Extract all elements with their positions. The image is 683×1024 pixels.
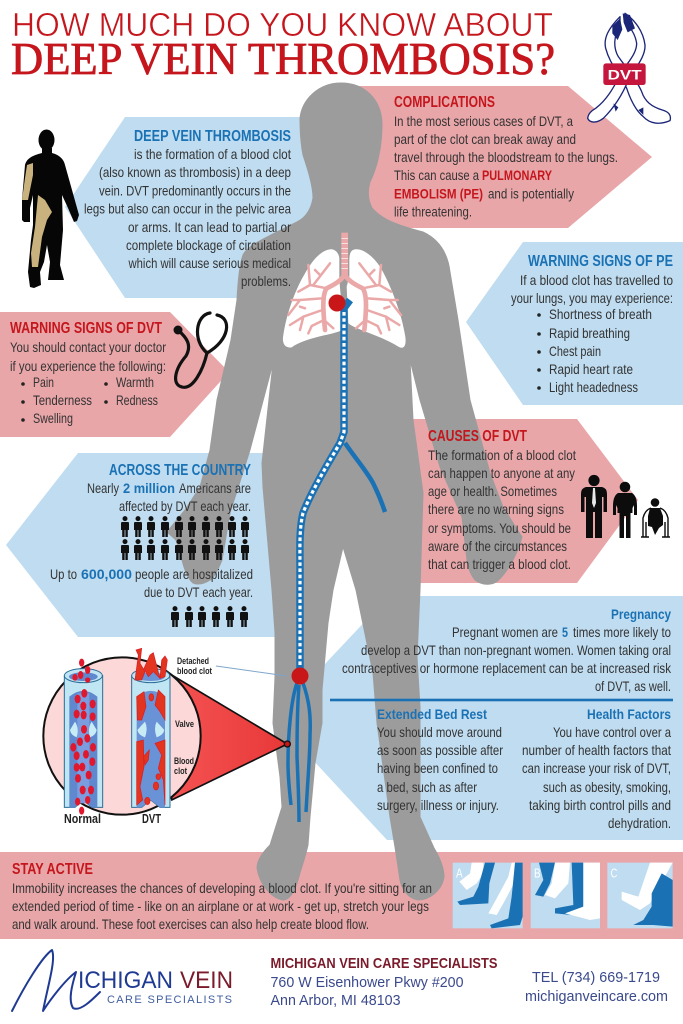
text: deep vein thrombosis: problems. [241,273,291,289]
text: complications: PULMONARY [482,167,553,183]
text: complications: travel through the bloodstream to the lungs. [394,149,618,165]
logo: Michigan Vein Care Specialists: ICHIGAN [78,967,173,994]
text: warning signs of DVT: Tenderness [33,392,92,408]
diagram: normal vs DVT vein [43,648,290,826]
text: warning signs of DVT: Swelling [33,410,73,426]
extended bed rest: Extended Bed Rest [377,706,487,722]
text: causes of DVT: that can trigger a blood clot. [428,556,571,572]
magnifier circle [43,657,201,815]
text: deep vein thrombosis: vein. DVT predominantly occurs in the [99,182,291,198]
label: blood clot: Blood [174,756,194,767]
health factors: Health Factors [587,706,671,722]
pregnancy: 5 [562,624,568,640]
text: deep vein thrombosis [84,128,291,289]
extended bed rest: You should move around [377,724,502,740]
text: warning signs of DVT: You should contact your doctor [10,339,166,355]
text: across the country: 2 million [123,480,175,496]
label: detached blood clot: blood clot [177,666,213,677]
icon: awareness ribbon with DVT badge: DVT [608,66,642,82]
text: across the country [50,462,253,600]
veins [288,300,385,822]
exercise B: B [534,865,541,880]
text: complications: life threatening. [394,204,472,220]
text: warning signs of PE: Rapid heart rate [549,361,633,377]
text: complications: In the most serious cases of DVT, a [394,113,573,129]
text: warning signs of DVT: Redness [116,392,158,408]
panel: risk factors background [274,596,683,840]
exercise C [607,863,673,928]
panel: deep vein thrombosis background [65,117,330,298]
text: across the country: Americans are [179,480,251,496]
footer: contact: TEL (734) 669-1719 [532,969,660,986]
text: deep vein thrombosis: legs but also can occur in the pelvic area [84,200,291,216]
footer: address: MICHIGAN VEIN CARE SPECIALISTS [270,955,498,972]
title [11,6,555,84]
text: risk factors [330,606,673,831]
panel: across the country background [6,453,300,637]
foot exercises illustration [453,863,673,928]
text: stay active [12,861,432,932]
text: across the country: people are hospitalized [135,566,253,582]
pregnancy: Pregnant women are [452,624,558,640]
DVT vein tube [132,648,170,807]
text: causes of DVT: there are no warning signs [428,501,564,517]
text: warning signs of DVT: WARNING SIGNS OF DVT [10,320,162,337]
icons: 600,000 people [171,606,248,627]
text: causes of DVT: The formation of a blood clot [428,447,576,463]
text: warning signs of PE: Shortness of breath [549,306,652,322]
text: warning signs of DVT: if you experience the following: [10,358,166,374]
panel: causes of DVT background [400,419,638,583]
text: warning signs of PE [511,253,673,395]
pregnancy: Pregnancy [611,606,671,622]
text: warning signs of PE: Rapid breathing [549,325,630,341]
text: deep vein thrombosis: (also known as thrombosis) in a deep [99,164,291,180]
label: blood clot: clot [174,766,188,777]
text: across the country: due to DVT each year. [144,584,253,600]
text: warning signs of PE: Light headedness [549,379,638,395]
magnifier cone [172,675,287,800]
extended bed rest: surgery, illness or injury. [377,797,499,813]
extended bed rest: a bed, such as after [377,779,477,795]
text: causes of DVT: can happen to anyone at any [428,465,575,481]
text: deep vein thrombosis: complete blockage of circulation [126,237,291,253]
logo: Michigan Vein Care Specialists: CARE SPECIALISTS [107,994,232,1006]
text: causes of DVT [428,428,576,572]
text: stay active: and walk around. These foot exercises can also help create blood flow. [12,916,369,932]
footer: address: 760 W Eisenhower Pkwy #200 [270,974,464,991]
text: complications: and is potentially [488,186,574,202]
footer: address: Ann Arbor, MI 48103 [270,992,400,1009]
label: detached blood clot [177,656,213,677]
title: DEEP VEIN THROMBOSIS? [11,34,555,84]
text: across the country: ACROSS THE COUNTRY [109,462,252,479]
label: blood clot [174,756,194,777]
label: detached blood clot: Detached [177,656,209,667]
text: complications: COMPLICATIONS [394,94,495,111]
panel: warning signs of PE background [466,242,683,405]
clot marker: knee [292,668,308,684]
callout line [216,666,287,676]
icon: DVT silhouette [22,130,79,288]
footer: contact: michiganveincare.com [525,988,668,1005]
text: stay active: STAY ACTIVE [12,861,93,878]
icons: man, overweight person, wheelchair [581,475,670,538]
title: HOW MUCH DO YOU KNOW ABOUT [12,6,553,43]
extended bed rest: having been confined to [377,760,498,776]
text: warning signs of DVT: Pain [33,374,54,390]
footer: address [270,955,498,1009]
label: DVT: DVT [142,812,161,826]
text: complications: part of the clot can break away and [394,131,576,147]
text: deep vein thrombosis: is the formation of a blood clot [134,146,291,162]
icons: 2 million people [121,516,249,560]
text: across the country: affected by DVT each year. [119,498,251,514]
lungs [283,233,406,348]
text: deep vein thrombosis: or arms. It can lead to partial or [128,219,291,235]
text: complications: EMBOLISM (PE) [394,186,483,202]
text: complications: This can cause a [394,167,479,183]
exercise C: C [611,865,618,880]
text: across the country: Up to [50,566,77,582]
text: complications [394,94,618,220]
text: causes of DVT: CAUSES OF DVT [428,428,527,445]
clot marker: lungs [328,294,346,312]
exercise A: A [456,865,463,880]
panel: stay active background [0,852,683,939]
text: deep vein thrombosis: DEEP VEIN THROMBOSIS [134,128,291,145]
label: normal: Normal [64,812,101,826]
exercise A [453,863,523,928]
text: deep vein thrombosis: which will cause serious medical [128,255,291,271]
text: warning signs of PE: Chest pain [549,343,601,359]
panel: complications background [355,86,652,228]
panel: warning signs of DVT background [0,312,229,437]
body silhouette [167,83,522,900]
exercise B [531,863,600,928]
extended bed rest: as soon as possible after [377,742,503,758]
pregnancy [342,606,672,694]
health factors [522,706,671,831]
text: causes of DVT: aware of the circumstances [428,538,567,554]
extended bed rest [377,706,503,813]
logo: Michigan Vein Care Specialists [12,950,233,1011]
text: across the country: Nearly [87,480,119,496]
text: stay active: Immobility increases the chances of developing a blood clot. If you're sitting for an [12,880,432,896]
apex marker [284,741,290,747]
text: causes of DVT: age or health. Sometimes [428,483,557,499]
label: valve: Valve [175,719,194,730]
icon: awareness ribbon with DVT badge [588,13,670,123]
text: warning signs of DVT [10,320,166,426]
text: stay active: extended period of time - like on an airplane or at work - get up, stretch your legs [12,898,429,914]
normal vein tube [64,659,103,815]
text: causes of DVT: or symptoms. You should be [428,520,571,536]
text: warning signs of DVT: Warmth [116,374,154,390]
footer: contact [525,969,668,1005]
icon: stethoscope [174,313,227,387]
logo: Michigan Vein Care Specialists: VEIN [180,967,233,994]
health factors: dehydration. [608,815,671,831]
text: across the country: 600,000 [81,566,132,582]
